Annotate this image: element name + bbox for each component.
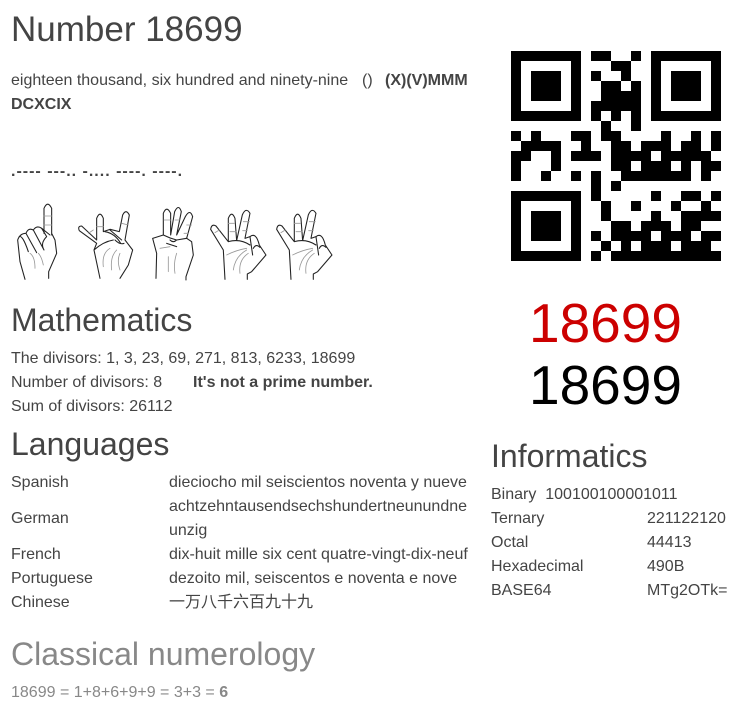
number name and roman numeral: eighteen thousand, six hundred and ninety-nine (11, 72, 348, 89)
row: spanish: dieciocho mil seiscientos noventa y nueve (169, 474, 467, 491)
row: spanish (11, 474, 467, 491)
row: portuguese (11, 570, 457, 587)
number name and roman numeral (11, 72, 468, 113)
sum of divisors: Sum of divisors: 26112 (11, 398, 173, 415)
heading: classical numerology: Classical numerology (11, 636, 315, 672)
heading: mathematics: Mathematics (11, 302, 192, 338)
row: portuguese: dezoito mil, seiscentos e noventa e nove (169, 570, 457, 587)
row: base64: BASE64 (491, 582, 551, 599)
hand: digit 1 (18, 204, 57, 279)
morse code: .---- ---.. -.... ----. ----. (11, 163, 183, 180)
row: base64 (491, 582, 727, 599)
title: Number 18699 (11, 10, 243, 49)
row: chinese: 一万八千六百九十九 (169, 594, 313, 611)
panel: mathematics (11, 302, 373, 415)
number name and roman numeral: DCXCIX (11, 96, 71, 113)
number name and roman numeral: () (362, 72, 373, 89)
row: hexadecimal (491, 558, 684, 575)
icon: sign language hands (17, 204, 332, 280)
row: french (11, 546, 468, 563)
row: binary: Binary 100100100001011 (491, 486, 678, 503)
hand: digit 9 second (277, 210, 332, 279)
row: portuguese: Portuguese (11, 570, 93, 587)
row: french: dix-huit mille six cent quatre-vingt-dix-neuf (169, 546, 468, 563)
row: base64: MTg2OTk= (647, 582, 727, 599)
number name and roman numeral: (X)(V)MMM (385, 72, 468, 89)
row: german: German (11, 510, 69, 527)
hand: digit 8 (79, 212, 133, 278)
row: german: achtzehntausendsechshundertneunundne (169, 498, 467, 515)
row: octal: Octal (491, 534, 528, 551)
QR code (511, 51, 721, 261)
row: octal (491, 534, 692, 551)
row: chinese: Chinese (11, 594, 70, 611)
row: spanish: Spanish (11, 474, 69, 491)
hand: digit 9 (211, 210, 266, 279)
row: chinese (11, 593, 313, 611)
number of divisors: Number of divisors: 8 (11, 374, 162, 391)
number in black: 18699 (529, 354, 682, 416)
row: french: French (11, 546, 61, 563)
panel: classical numerology (11, 636, 315, 701)
heading: informatics: Informatics (491, 438, 647, 474)
heading: languages: Languages (11, 426, 169, 462)
row: ternary (491, 510, 726, 527)
row: octal: 44413 (647, 534, 692, 551)
digit sum: 18699 = 1+8+6+9+9 = 3+3 = 6 (11, 684, 228, 701)
row: ternary: 221122120 (647, 510, 726, 527)
row: german (11, 498, 467, 539)
panel: informatics (491, 438, 727, 599)
number in red: 18699 (529, 292, 682, 354)
divisors list: The divisors: 1, 3, 23, 69, 271, 813, 6233, 18699 (11, 350, 355, 367)
row: hexadecimal: 490B (647, 558, 684, 575)
prime status: It's not a prime number. (193, 374, 373, 391)
hand: digit 6 (153, 207, 193, 280)
row: ternary: Ternary (491, 510, 544, 527)
row: hexadecimal: Hexadecimal (491, 558, 583, 575)
panel: languages (11, 426, 468, 611)
row: german: unzig (169, 522, 207, 539)
